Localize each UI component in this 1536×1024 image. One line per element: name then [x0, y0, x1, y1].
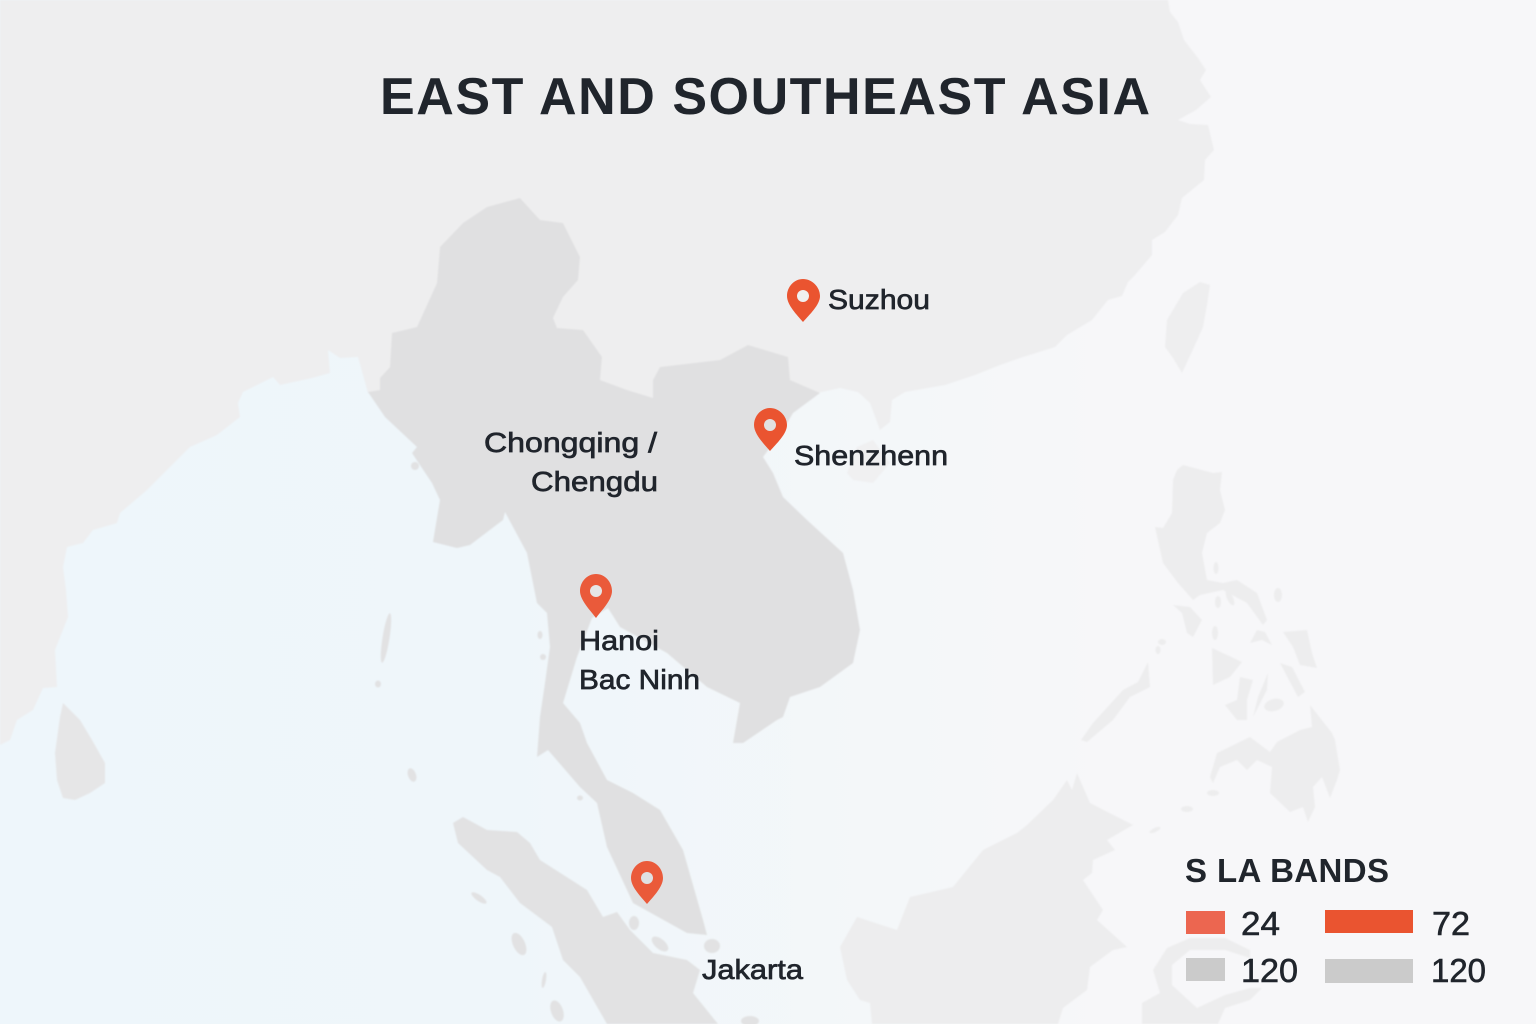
- legend item: 24: 24: [1241, 905, 1280, 942]
- title: EAST AND SOUTHEAST ASIA: [380, 68, 1150, 126]
- label: Hanoi / Bac Ninh: Bac Ninh: [579, 664, 700, 695]
- legend item: 120 left: [1186, 952, 1298, 989]
- land: small western islands: [375, 462, 759, 1024]
- legend item: 72: 72: [1432, 905, 1470, 942]
- label: Hanoi / Bac Ninh: Hanoi: [579, 625, 659, 656]
- land: Sri Lanka: [55, 703, 105, 800]
- land: mainland Southeast Asia: [368, 198, 860, 935]
- land: Sumatra: [453, 817, 718, 1024]
- label: Chongqing / Chengdu: Chongqing /: [484, 427, 657, 458]
- pin: Shenzhenn: [754, 408, 787, 451]
- label: Chongqing / Chengdu: [484, 427, 658, 497]
- land: Taiwan: [1165, 282, 1210, 373]
- legend heading: S LA BANDS: [1185, 852, 1389, 889]
- land: Philippines: [1081, 465, 1340, 834]
- pin: Jakarta: [631, 861, 663, 904]
- legend item: 120 left: 120: [1241, 952, 1298, 989]
- pin: Suzhou: [787, 279, 820, 322]
- label: Suzhou: Suzhou: [828, 284, 930, 315]
- legend item: 72: [1325, 905, 1470, 942]
- land: Hainan: [847, 440, 890, 483]
- legend: SLA bands: [1185, 852, 1486, 989]
- legend item: 120 right: 120: [1431, 952, 1486, 989]
- label: Chongqing / Chengdu: Chengdu: [531, 466, 658, 497]
- land: Sulawesi: [1142, 938, 1262, 1024]
- legend item: 120 right: [1325, 952, 1486, 989]
- label: Shenzhenn: Shenzhenn: [794, 440, 948, 471]
- land: China and India: [0, 0, 1214, 745]
- label: Jakarta: Jakarta: [702, 954, 803, 985]
- land: Borneo: [840, 773, 1133, 1024]
- legend item: 24: [1186, 905, 1280, 942]
- pin: Hanoi / Bac Ninh: [580, 574, 612, 618]
- label: Hanoi / Bac Ninh: [579, 625, 700, 695]
